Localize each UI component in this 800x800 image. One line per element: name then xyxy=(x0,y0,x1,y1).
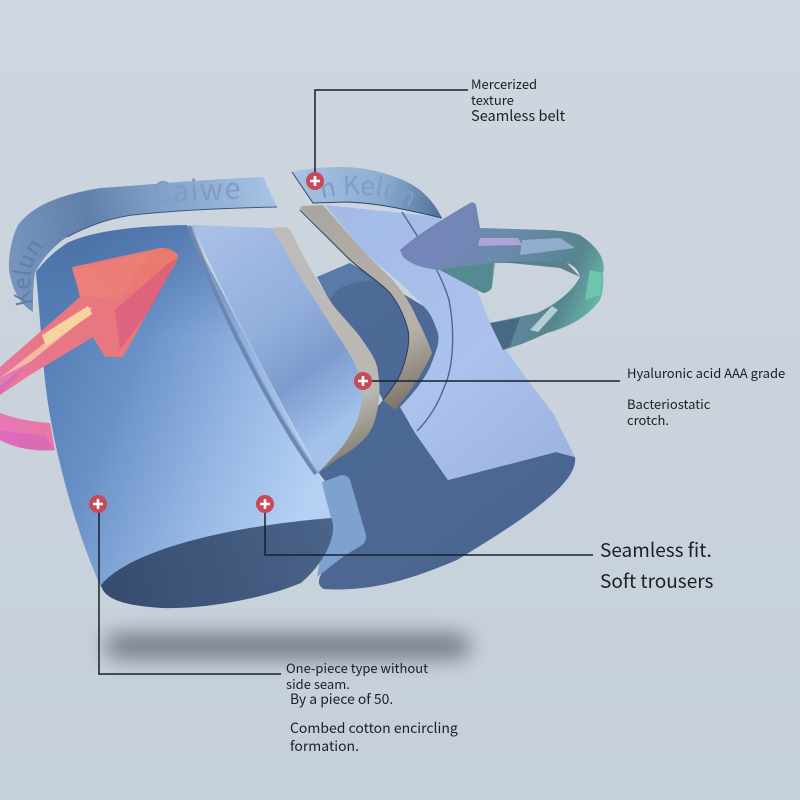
leader line xyxy=(99,504,281,674)
waistband woven text: Kelun xyxy=(12,242,42,306)
label: Seamless fit. xyxy=(600,536,712,563)
label: texture xyxy=(471,90,514,109)
right panel seam xyxy=(402,212,453,431)
left leg opening xyxy=(101,518,333,608)
label: Combed cotton encircling xyxy=(290,718,458,738)
leader line xyxy=(265,504,593,555)
label: Seamless belt xyxy=(471,105,566,126)
back waistband dark area and right leg interior xyxy=(317,263,575,589)
leader line xyxy=(315,90,468,181)
waistband woven text right: n Kelun xyxy=(322,175,414,206)
callout: one-piece xyxy=(89,495,458,756)
back waistband highlight xyxy=(317,263,374,300)
right leg front panel xyxy=(325,205,575,480)
arrow: pink rotation arrow xyxy=(0,248,178,451)
label: Soft trousers xyxy=(600,567,714,594)
right waistband xyxy=(292,167,442,218)
left waistband xyxy=(9,165,277,312)
label: By a piece of 50. xyxy=(290,689,393,709)
crotch pouch panel xyxy=(317,475,366,577)
waistband lower edge xyxy=(67,207,277,237)
left leg side panel xyxy=(36,225,331,587)
callout: hyaluronic acid crotch xyxy=(354,363,785,429)
leader line xyxy=(363,380,620,382)
arrow: teal rotation arrow xyxy=(400,202,604,350)
hotspot xyxy=(306,172,324,190)
label: One-piece type without xyxy=(286,658,428,677)
right leg inner mesh lining xyxy=(300,205,432,410)
label: Hyaluronic acid AAA grade xyxy=(627,363,785,382)
hotspot xyxy=(354,372,372,390)
dark edge of inner lining xyxy=(300,210,409,400)
label: crotch. xyxy=(627,410,669,429)
garment illustration xyxy=(36,205,575,608)
callout: seamless belt xyxy=(306,74,566,190)
label: Bacteriostatic xyxy=(627,394,711,413)
label: Mercerized xyxy=(471,74,537,93)
left leg top shading xyxy=(36,225,245,380)
label: side seam. xyxy=(286,674,350,693)
hotspot xyxy=(256,495,274,513)
callout: seamless fit xyxy=(256,495,714,594)
centre seam xyxy=(189,226,316,474)
left leg mesh lining xyxy=(272,227,379,472)
label: formation. xyxy=(290,736,359,756)
left leg buttock panel xyxy=(192,225,362,472)
hotspot xyxy=(89,495,107,513)
left waistband: Caiwe xyxy=(151,165,243,212)
floor shadow xyxy=(105,634,470,658)
